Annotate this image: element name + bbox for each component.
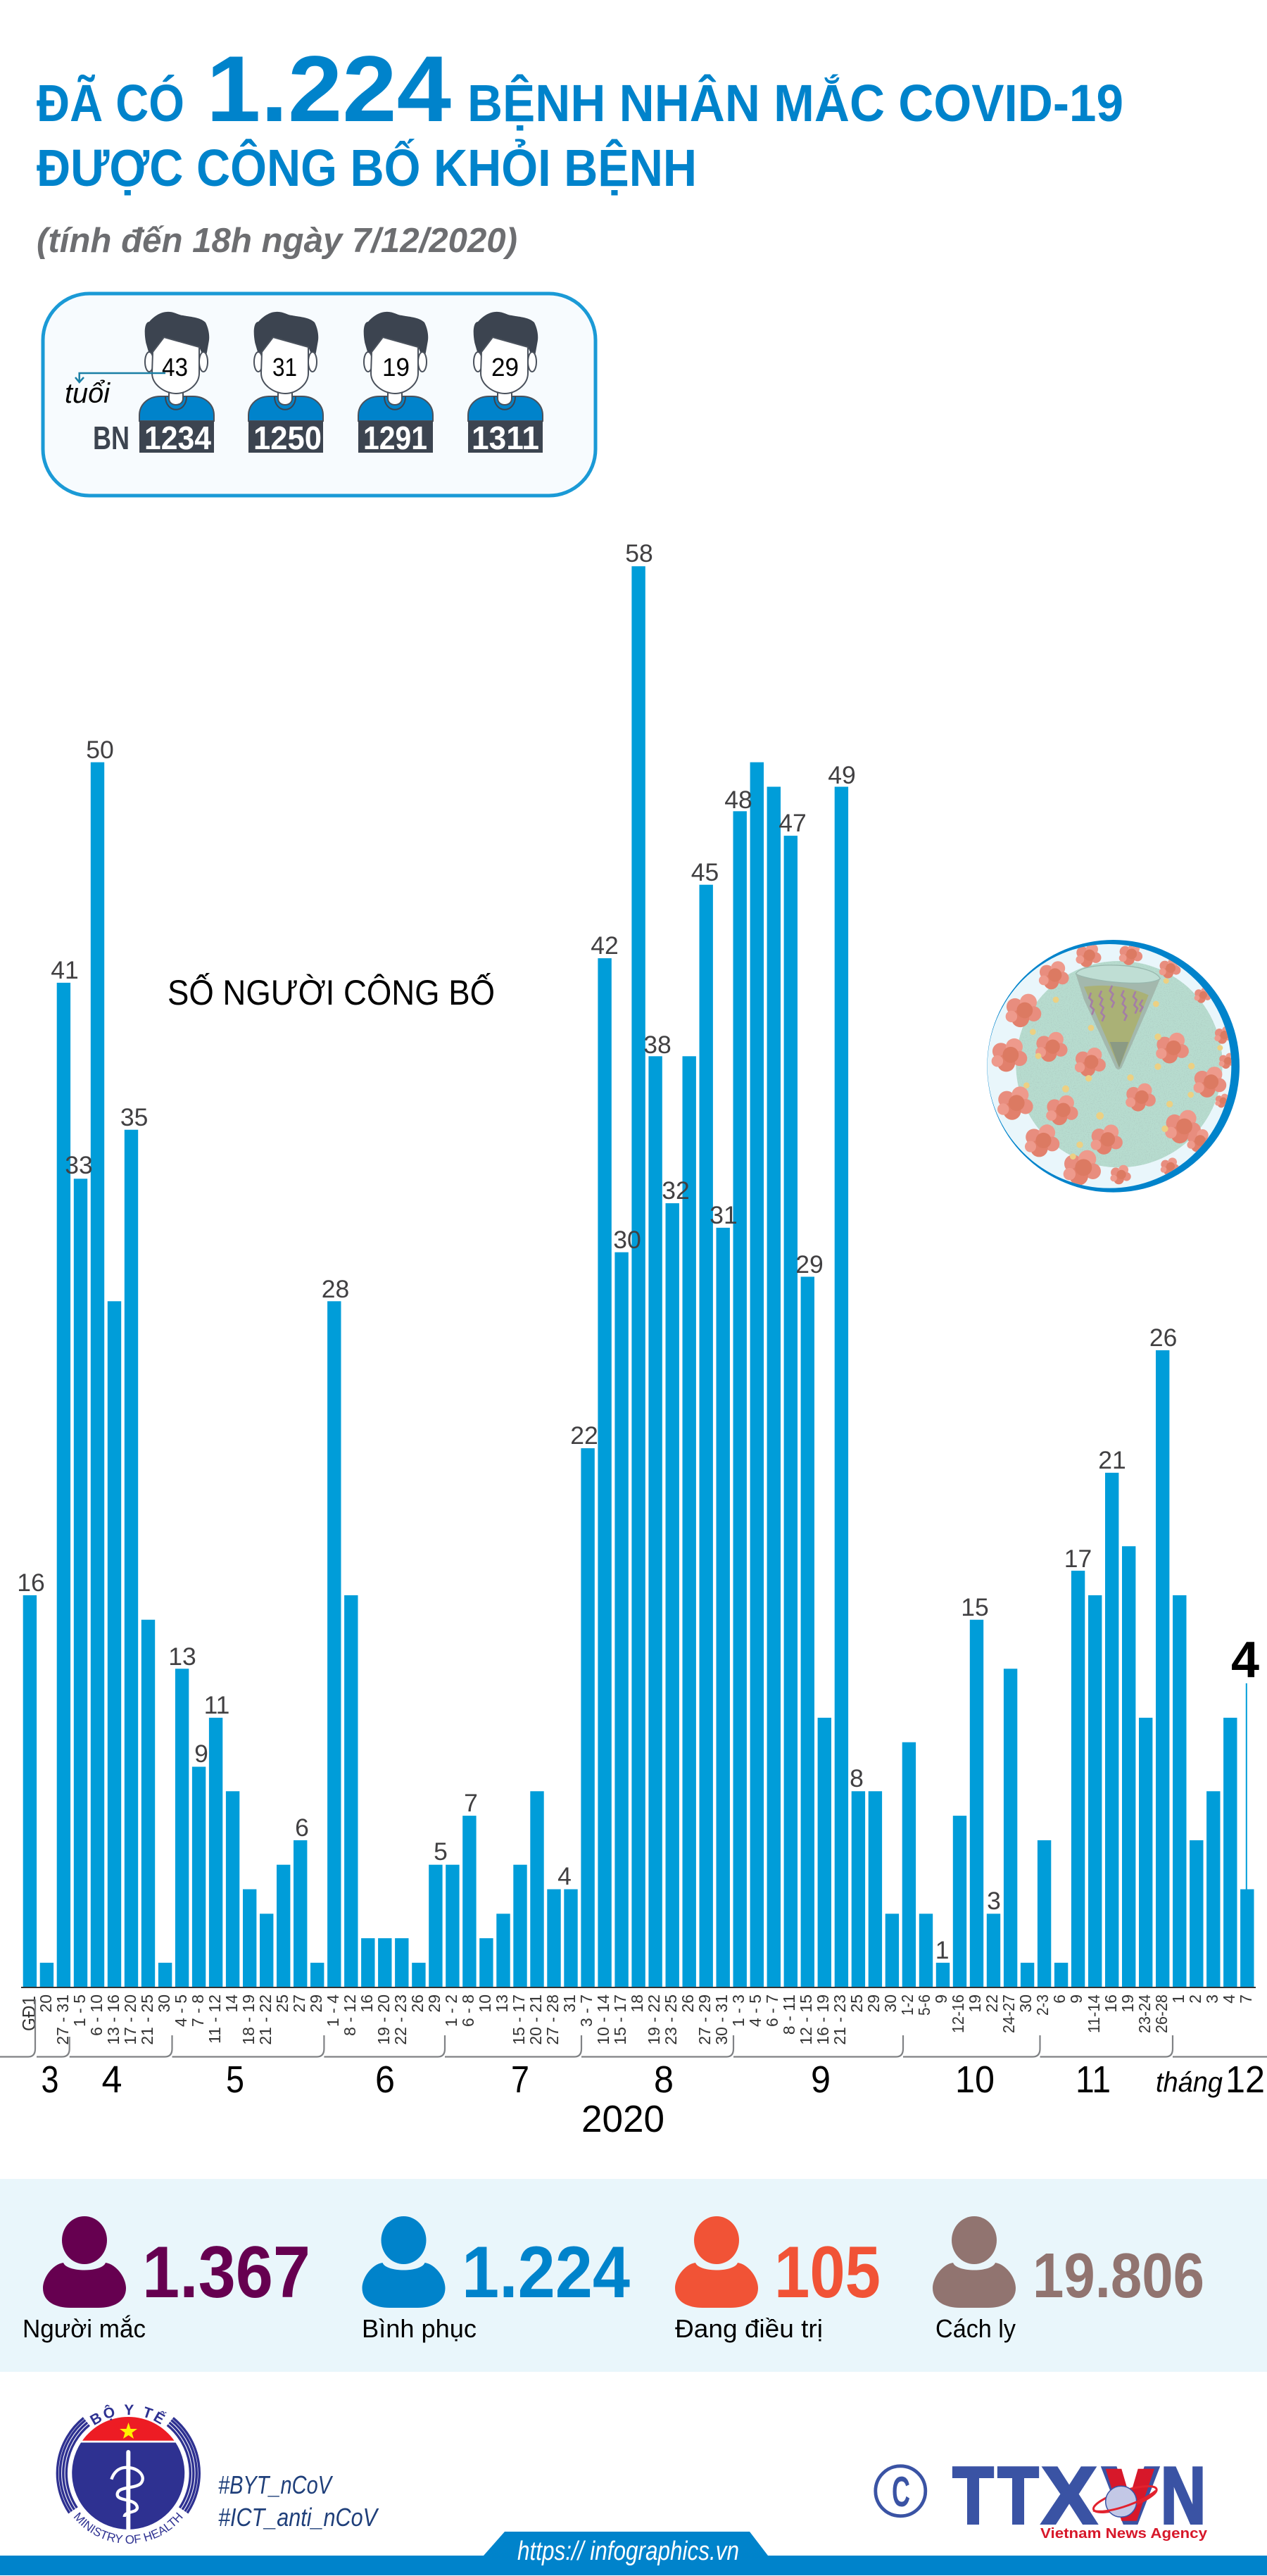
logo: TTXVN Vietnam News Agency: Vietnam News Agency [1040, 2526, 1208, 2542]
value labels: 45 [691, 858, 719, 886]
hashtags: #BYT_nCoV [218, 2470, 333, 2499]
date labels: 6 [1050, 1994, 1069, 2004]
highlighted latest value: 4 [1231, 1632, 1259, 1688]
logo: TTXVN Vietnam News Agency: V [1102, 2451, 1159, 2541]
title: BỆNH NHÂN MẮC COVID-19 [467, 74, 1123, 132]
date labels: 12-16 [949, 1994, 967, 2033]
value labels: 22 [570, 1421, 598, 1450]
value labels: 48 [724, 786, 752, 814]
value labels: 1 [935, 1936, 949, 1964]
date labels: 21 - 23 [831, 1994, 849, 2045]
logo: Ministry of Health: BỘ Y TẾ [89, 2405, 168, 2425]
patient 1250 [248, 312, 323, 456]
date labels: 19 - 20 [374, 1994, 393, 2045]
stat: recovered [362, 2216, 630, 2313]
date labels: 8 - 11 [780, 1994, 798, 2035]
value labels: 32 [662, 1176, 690, 1205]
date labels: 20 [37, 1994, 55, 2013]
stat: cases [43, 2216, 310, 2313]
value labels: 28 [322, 1275, 349, 1303]
stat: recovered: 1.224 [462, 2232, 630, 2313]
illustration: coronavirus [987, 940, 1240, 1193]
date labels: 12 - 15 [797, 1994, 815, 2045]
patient 1291: 1291 [363, 420, 427, 456]
patient 1250: 31 [272, 353, 297, 382]
value labels: 17 [1064, 1545, 1092, 1573]
date labels: 30 - 31 [712, 1994, 731, 2045]
value labels: 33 [65, 1151, 93, 1179]
date labels: 31 [560, 1994, 579, 2013]
date labels: 17 - 20 [121, 1994, 139, 2045]
value labels: 38 [643, 1031, 672, 1059]
subtitle: date: (tính đến 18h ngày 7/12/2020) [37, 222, 517, 260]
value labels: 42 [591, 931, 619, 960]
date labels: 29 [425, 1994, 443, 2013]
date labels: 3 - 7 [577, 1994, 595, 2027]
date labels: 18 - 19 [239, 1994, 258, 2045]
stat: quarantine [933, 2216, 1204, 2311]
date labels: 13 - 16 [104, 1994, 122, 2045]
date labels: 10 [476, 1994, 494, 2013]
date labels: 4 [1220, 1994, 1238, 2004]
value labels [17, 539, 1177, 1964]
date labels: 18 [628, 1994, 646, 2013]
date labels: 24-27 [1000, 1994, 1018, 2033]
footer tab: website: https:// infographics.vn [517, 2537, 739, 2566]
date labels: 30 [155, 1994, 173, 2013]
value labels: 29 [795, 1250, 824, 1278]
patient 1291: 19 [382, 353, 410, 382]
value labels: 8 [850, 1764, 864, 1792]
value labels: 5 [434, 1837, 448, 1866]
date labels: 15 - 17 [510, 1994, 528, 2045]
title [37, 37, 1123, 197]
stat label: cases: Người mắc [23, 2314, 146, 2343]
date labels: 2-3 [1033, 1994, 1052, 2016]
date labels: 27 [290, 1994, 308, 2013]
month labels: 8 [654, 2059, 674, 2101]
value labels: 6 [295, 1814, 309, 1842]
date labels: 23 - 25 [662, 1994, 680, 2045]
chart heading: SỐ NGƯỜI CÔNG BỐ [168, 972, 495, 1012]
label: patient number: BN [93, 420, 130, 456]
patient 1234 [139, 312, 214, 456]
value labels: 31 [710, 1201, 738, 1229]
date labels: 21 - 25 [138, 1994, 156, 2045]
month labels: 5 [226, 2059, 244, 2101]
date labels: 27 - 29 [695, 1994, 714, 2045]
label: age: tuổi [65, 378, 111, 409]
value labels: 50 [86, 736, 114, 764]
date labels: 6 - 8 [459, 1994, 477, 2027]
month labels: 6 [375, 2059, 395, 2101]
stat label: recovered: Bình phục [362, 2314, 477, 2343]
stat: under treatment [675, 2216, 881, 2313]
logo: TTXVN Vietnam News Agency: C [892, 2468, 910, 2515]
date labels: 1 - 2 [442, 1994, 460, 2027]
month brackets [0, 1999, 1267, 2057]
title: ĐÃ CÓ [37, 74, 184, 132]
value labels: 35 [120, 1103, 148, 1131]
date labels: 29 [307, 1994, 325, 2013]
date labels: 7 - 8 [189, 1994, 207, 2027]
date labels: 1-2 [898, 1994, 916, 2016]
month labels [41, 2059, 1265, 2101]
date labels: 26 [408, 1994, 427, 2013]
date labels: 15 - 17 [611, 1994, 629, 2045]
patient 1291 [358, 312, 433, 456]
hashtags [218, 2470, 379, 2532]
hashtags: #ICT_anti_nCoV [218, 2503, 379, 2532]
date labels: 21 - 22 [256, 1994, 275, 2045]
date labels: 9 [932, 1994, 950, 2004]
title: ĐƯỢC CÔNG BỐ KHỎI BỆNH [37, 139, 697, 197]
month labels: 10 [955, 2059, 995, 2101]
date labels [18, 1994, 1255, 2045]
logo: TTXVN Vietnam News Agency [876, 2451, 1208, 2542]
date labels: 27 - 31 [53, 1994, 72, 2045]
stat: quarantine: 19.806 [1033, 2241, 1204, 2311]
date labels: 20 - 21 [527, 1994, 545, 2045]
date labels: 4 - 5 [746, 1994, 764, 2027]
date labels: 19 - 22 [645, 1994, 663, 2045]
value labels: 15 [961, 1593, 989, 1621]
value labels: 41 [51, 956, 79, 984]
arrow: age pointer [75, 373, 165, 382]
date labels: 23-24 [1135, 1994, 1154, 2033]
date labels: 16 [1102, 1994, 1120, 2013]
date labels: 16 [358, 1994, 376, 2013]
month labels: 4 [101, 2059, 122, 2101]
footer bar [0, 2556, 1267, 2575]
value labels: 7 [464, 1789, 478, 1817]
date labels: 8 - 12 [341, 1994, 359, 2036]
stat: under treatment: 105 [774, 2232, 881, 2313]
date labels: 4 - 5 [172, 1994, 190, 2027]
month labels: 11 [1076, 2059, 1111, 2101]
year label: 2020 [581, 2098, 664, 2140]
date labels: 16 - 19 [814, 1994, 832, 2045]
date labels: 1 - 4 [324, 1994, 342, 2027]
bar chart [23, 566, 1254, 1987]
date labels: 11-14 [1085, 1994, 1103, 2033]
value labels: 9 [194, 1740, 208, 1768]
date labels: 13 [493, 1994, 511, 2013]
value labels: 49 [828, 761, 856, 789]
value labels: 3 [987, 1887, 1001, 1915]
value labels: 16 [17, 1569, 45, 1597]
date labels: 6 - 7 [763, 1994, 781, 2027]
month word: tháng [1156, 2067, 1223, 2098]
logo: TTXVN Vietnam News Agency: X [1042, 2451, 1097, 2541]
patient 1311: 1311 [472, 420, 539, 456]
patient 1234: 1234 [144, 420, 211, 456]
patient 1311 [468, 312, 543, 456]
stat label: under treatment: Đang điều trị [675, 2314, 823, 2343]
value labels: 21 [1098, 1446, 1126, 1474]
date labels: 5-6 [915, 1994, 933, 2016]
logo: Ministry of Health: MINISTRY OF HEALTH [73, 2512, 183, 2544]
date labels: 10 - 14 [594, 1994, 612, 2045]
date labels: 30 [1016, 1994, 1035, 2013]
chart baseline [21, 1987, 1256, 1988]
month labels: 9 [811, 2059, 831, 2101]
value labels: 26 [1149, 1324, 1177, 1352]
date labels: 1 - 3 [729, 1994, 748, 2027]
value labels: 58 [625, 539, 653, 567]
date labels: 25 [847, 1994, 866, 2013]
stat label: quarantine: Cách ly [935, 2314, 1016, 2343]
month labels: 3 [41, 2059, 59, 2101]
date labels: 29 [864, 1994, 883, 2013]
month labels: 12 [1225, 2059, 1265, 2101]
date labels: 19 [1118, 1994, 1137, 2013]
patient 1234: 43 [162, 353, 188, 382]
date labels: 1 [1169, 1994, 1187, 2004]
date labels: 1 - 5 [70, 1994, 89, 2027]
date labels: 22 - 23 [391, 1994, 410, 2045]
date labels: 26 [679, 1994, 697, 2013]
title: 1.224 [206, 37, 451, 142]
value labels: 4 [557, 1862, 572, 1890]
date labels: 22 [983, 1994, 1001, 2013]
date labels: 7 [1237, 1994, 1255, 2004]
logo: TTXVN Vietnam News Agency: T [998, 2451, 1039, 2541]
logo: TTXVN Vietnam News Agency: T [953, 2451, 994, 2541]
date labels: 27 - 28 [543, 1994, 562, 2045]
panel: summary statistics [0, 2179, 1267, 2372]
patient 1250: 1250 [253, 420, 322, 456]
value labels: 47 [779, 809, 807, 837]
date labels: GĐ1 [18, 1996, 39, 2031]
logo: Ministry of Health [56, 2405, 201, 2544]
date labels: 9 [1067, 1994, 1085, 2004]
stat: cases: 1.367 [142, 2232, 310, 2313]
date labels: 3 [1203, 1994, 1221, 2004]
panel: recent recovered patients [43, 294, 595, 496]
date labels: 25 [273, 1994, 291, 2013]
date labels: 19 [966, 1994, 984, 2013]
logo: TTXVN Vietnam News Agency: N [1161, 2451, 1206, 2541]
date labels: 6 - 10 [87, 1994, 106, 2036]
date labels: 14 [222, 1994, 241, 2013]
patient 1311: 29 [491, 353, 519, 382]
date labels: 30 [881, 1994, 900, 2013]
value labels: 30 [613, 1226, 641, 1254]
date labels: 26-28 [1152, 1994, 1171, 2033]
date labels: 2 [1186, 1994, 1204, 2004]
month labels: 7 [511, 2059, 529, 2101]
date labels: 11 - 12 [206, 1994, 224, 2044]
value labels: 11 [204, 1691, 229, 1719]
value labels: 13 [168, 1642, 196, 1671]
